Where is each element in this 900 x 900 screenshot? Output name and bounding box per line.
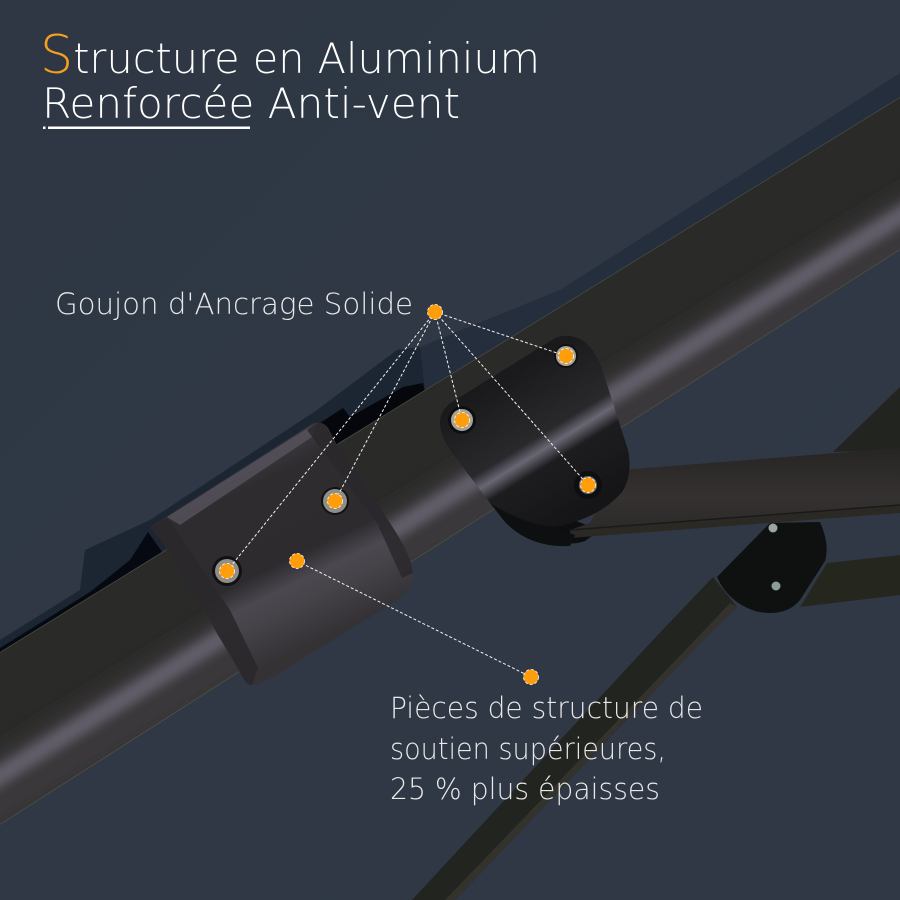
leader line: structure parts xyxy=(297,561,531,677)
lower right strut xyxy=(412,387,900,900)
title: Renforcée Anti-vent xyxy=(42,79,460,128)
leader lines: anchor stud xyxy=(227,312,588,571)
title: Structure en Aluminium xyxy=(40,25,540,86)
label: structure parts xyxy=(390,691,703,806)
bolt rings xyxy=(212,344,602,586)
upper clamp part xyxy=(150,422,413,686)
navy hem strip above the bar xyxy=(0,73,900,660)
label: structure parts: 25 % plus épaisses xyxy=(390,772,660,806)
support arm xyxy=(490,448,900,546)
label: structure parts: Pièces de structure de xyxy=(390,691,703,725)
label: structure parts: soutien supérieures, xyxy=(390,732,666,766)
lower hub xyxy=(717,522,827,613)
title xyxy=(40,25,540,129)
label: anchor stud: Goujon d'Ancrage Solide xyxy=(55,287,413,321)
bracket plate xyxy=(440,336,630,527)
orange marker dots xyxy=(220,304,596,684)
